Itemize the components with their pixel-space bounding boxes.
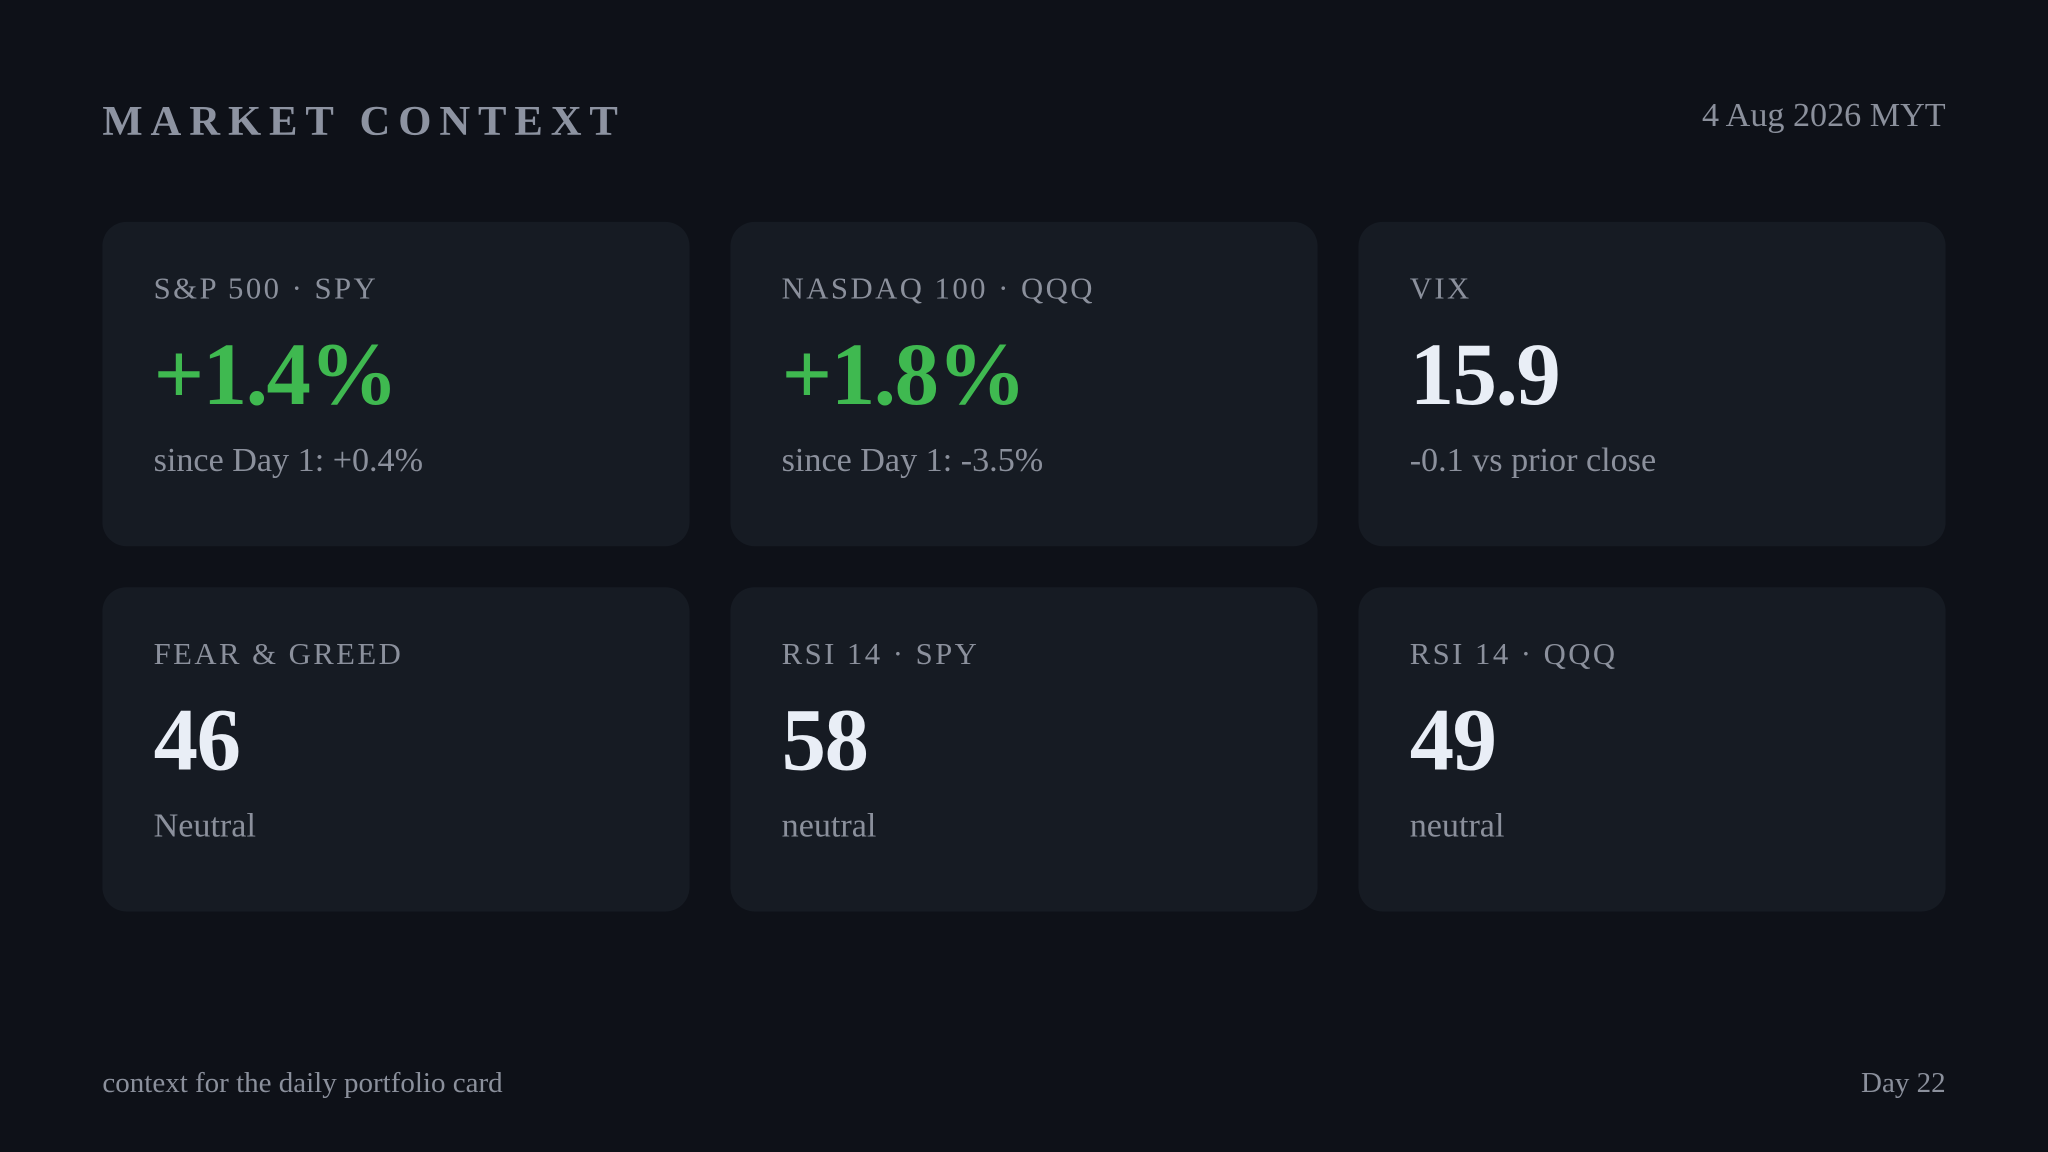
value: NASDAQ change: +1.8% [782,326,1025,424]
note: S&P 500 since day 1: since Day 1: +0.4% [154,442,423,479]
panel: Fear and Greed [102,587,689,912]
value: S&P 500 change: +1.4% [154,326,397,424]
value: Fear and Greed index: 46 [154,691,240,789]
label: Fear and Greed: FEAR & GREED [154,637,403,671]
date: 4 Aug 2026 MYT [1702,97,1946,134]
note: RSI QQQ state: neutral [1410,807,1504,844]
footer note: context for the daily portfolio card [102,1067,503,1099]
panel: S&P 500 SPY [102,222,689,546]
panel: VIX [1358,222,1946,546]
title: MARKET CONTEXT [102,98,626,145]
value: VIX level: 15.9 [1410,326,1559,424]
value: RSI SPY: 58 [782,691,868,789]
label: RSI QQQ: RSI 14 · QQQ [1410,637,1618,671]
label: S&P 500: S&P 500 · SPY [154,272,378,306]
note: NASDAQ since day 1: since Day 1: -3.5% [782,442,1043,479]
label: RSI SPY: RSI 14 · SPY [782,637,979,671]
label: NASDAQ 100: NASDAQ 100 · QQQ [782,272,1095,306]
panel: RSI 14 QQQ [1358,587,1946,912]
value: RSI QQQ: 49 [1410,691,1496,789]
panel: NASDAQ 100 QQQ [730,222,1318,546]
note: Fear and Greed state: Neutral [154,807,256,844]
note: RSI SPY state: neutral [782,807,876,844]
footer day counter: Day 22 [1861,1067,1946,1099]
label: VIX: VIX [1410,272,1472,306]
note: VIX change: -0.1 vs prior close [1410,442,1656,479]
panel: RSI 14 SPY [730,587,1318,912]
